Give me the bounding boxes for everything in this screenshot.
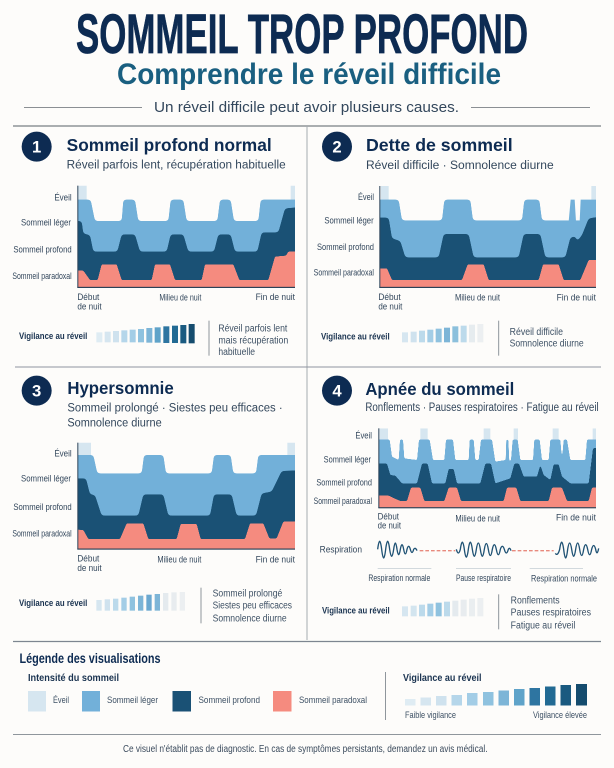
stage labels: Sommeil léger bbox=[21, 474, 71, 484]
footer disclaimer: Ce visuel n'établit pas de diagnostic. En cas de symptômes persistants, demandez un avis médical. bbox=[123, 744, 488, 755]
stage labels: Sommeil profond bbox=[317, 242, 374, 252]
stage labels: Sommeil léger bbox=[324, 454, 371, 464]
panel 2 subtitle: Réveil difficile · Somnolence diurne bbox=[366, 158, 554, 172]
legend heading: Légende des visualisations bbox=[20, 651, 160, 666]
panel 4 notes bbox=[511, 595, 591, 631]
panel 1 subtitle: Réveil parfois lent, récupération habituelle bbox=[67, 157, 286, 171]
panel 1 notes bbox=[218, 324, 288, 358]
sleep chart 3 bbox=[77, 442, 295, 550]
panel: legend bbox=[20, 651, 587, 721]
stage labels: Sommeil profond bbox=[13, 502, 72, 512]
respiration chart bbox=[320, 541, 599, 584]
panel 1 notes: habituelle bbox=[218, 347, 255, 358]
vigilance meter 1: Vigilance au réveil bbox=[19, 331, 87, 341]
panel 4 heading: Apnée du sommeil bbox=[365, 379, 514, 399]
respiration chart: Respiration normale bbox=[531, 574, 597, 584]
time axis labels: Fin de nuit bbox=[556, 513, 596, 523]
stage labels: Sommeil léger bbox=[21, 218, 71, 228]
panel 4 notes: Pauses respiratoires bbox=[511, 608, 591, 619]
time axis labels: Fin de nuit bbox=[256, 292, 295, 302]
stage labels: Sommeil paradoxal bbox=[12, 271, 72, 281]
subtitle: Comprendre le réveil difficile bbox=[117, 58, 501, 91]
sleep chart 2 bbox=[379, 186, 596, 288]
vigilance meter 4: Vigilance au réveil bbox=[322, 605, 390, 615]
time axis labels: Fin de nuit bbox=[256, 554, 295, 564]
vigilance meter 2: Vigilance au réveil bbox=[321, 331, 390, 341]
vigilance legend: Vigilance au réveil bbox=[403, 672, 482, 684]
sleep intensity legend bbox=[28, 672, 367, 712]
stage labels: Sommeil paradoxal bbox=[12, 529, 72, 539]
stage labels: Sommeil profond bbox=[13, 244, 72, 254]
panel 2 notes bbox=[510, 327, 584, 350]
time axis labels bbox=[77, 292, 295, 311]
panel 3: hypersomnie bbox=[12, 376, 307, 624]
time axis labels bbox=[77, 554, 295, 573]
time axis labels: de nuit bbox=[378, 521, 401, 531]
time axis labels: Début bbox=[378, 511, 399, 521]
panel 1 heading: Sommeil profond normal bbox=[67, 135, 272, 155]
time axis labels bbox=[378, 511, 596, 531]
panel 2 heading: Dette de sommeil bbox=[366, 135, 513, 155]
stage labels: Éveil bbox=[54, 449, 72, 459]
time axis labels: Milieu de nuit bbox=[157, 554, 202, 564]
panel 2 notes: Réveil difficile bbox=[510, 327, 563, 338]
number badge 1 bbox=[22, 132, 52, 162]
stage labels: Éveil bbox=[54, 193, 72, 203]
panel 3 notes: Siestes peu efficaces bbox=[213, 600, 292, 611]
panel 3 notes: Somnolence diurne bbox=[213, 613, 287, 624]
stage labels: Sommeil paradoxal bbox=[314, 268, 374, 278]
panel 3 subtitle: Somnolence diurne bbox=[67, 416, 162, 430]
stage labels: Éveil bbox=[355, 430, 372, 440]
time axis labels: Début bbox=[77, 554, 100, 564]
time axis labels: de nuit bbox=[77, 563, 102, 573]
panel 2 notes: Somnolence diurne bbox=[510, 339, 584, 350]
time axis labels bbox=[378, 292, 596, 311]
respiration chart: Respiration normale bbox=[368, 573, 430, 583]
panel 3 subtitle bbox=[67, 401, 283, 430]
sleep intensity legend: Sommeil profond bbox=[198, 695, 260, 706]
sleep intensity legend: Éveil bbox=[53, 695, 69, 706]
panel 4: apnée du sommeil bbox=[314, 376, 607, 631]
number badge 3: 3 bbox=[32, 382, 41, 401]
panel 2: dette de sommeil bbox=[314, 132, 607, 356]
panel 3 notes: Sommeil prolongé bbox=[213, 589, 283, 600]
stage labels bbox=[12, 449, 72, 539]
number badge 1: 1 bbox=[32, 138, 41, 157]
panel 3 heading: Hypersomnie bbox=[67, 378, 174, 398]
time axis labels: Début bbox=[378, 292, 401, 302]
sleep chart 1 bbox=[77, 186, 295, 288]
time axis labels: Milieu de nuit bbox=[159, 293, 202, 303]
stage labels: Sommeil léger bbox=[324, 215, 374, 225]
sleep intensity legend: Sommeil léger bbox=[107, 695, 158, 706]
tagline: Un réveil difficile peut avoir plusieurs causes. bbox=[154, 99, 459, 116]
number badge 4: 4 bbox=[332, 382, 342, 401]
respiration chart: Respiration bbox=[320, 544, 362, 554]
sleep chart 4 bbox=[378, 428, 596, 508]
time axis labels: Milieu de nuit bbox=[455, 514, 500, 524]
vigilance meter 3: Vigilance au réveil bbox=[19, 598, 87, 608]
vigilance meter 4 bbox=[322, 598, 483, 616]
vigilance legend: Vigilance élevée bbox=[533, 710, 587, 721]
time axis labels: Début bbox=[77, 292, 100, 302]
sleep intensity legend: Intensité du sommeil bbox=[28, 672, 119, 684]
vigilance meter 3 bbox=[19, 592, 185, 611]
panel 1: sommeil profond normal bbox=[12, 132, 307, 358]
number badge 2 bbox=[322, 132, 352, 162]
number badge 2: 2 bbox=[332, 138, 342, 157]
time axis labels: de nuit bbox=[378, 301, 403, 311]
stage labels bbox=[314, 192, 374, 278]
vigilance meter 1 bbox=[19, 324, 195, 343]
vigilance legend: Faible vigilance bbox=[405, 710, 456, 721]
panel 3 notes bbox=[213, 589, 292, 624]
time axis labels: de nuit bbox=[77, 301, 102, 311]
vigilance meter 2 bbox=[321, 324, 483, 342]
panel 3 subtitle: Sommeil prolongé · Siestes peu efficaces · bbox=[67, 401, 283, 415]
panel 4 notes: Ronflements bbox=[511, 595, 560, 606]
respiration chart: Pause respiratoire bbox=[456, 573, 511, 583]
number badge 3 bbox=[22, 376, 52, 406]
sleep intensity legend: Sommeil paradoxal bbox=[299, 695, 367, 706]
stage labels: Sommeil profond bbox=[316, 478, 372, 488]
time axis labels: Milieu de nuit bbox=[455, 293, 500, 303]
stage labels bbox=[314, 430, 372, 506]
stage labels: Sommeil paradoxal bbox=[314, 496, 372, 506]
vigilance legend bbox=[403, 672, 587, 721]
stage labels: Éveil bbox=[358, 192, 374, 202]
panel 4 notes: Fatigue au réveil bbox=[511, 620, 575, 631]
panel 1 notes: mais récupération bbox=[218, 335, 288, 346]
panel 1 notes: Réveil parfois lent bbox=[218, 324, 288, 335]
number badge 4 bbox=[322, 376, 352, 406]
stage labels bbox=[12, 193, 72, 281]
time axis labels: Fin de nuit bbox=[557, 293, 596, 303]
